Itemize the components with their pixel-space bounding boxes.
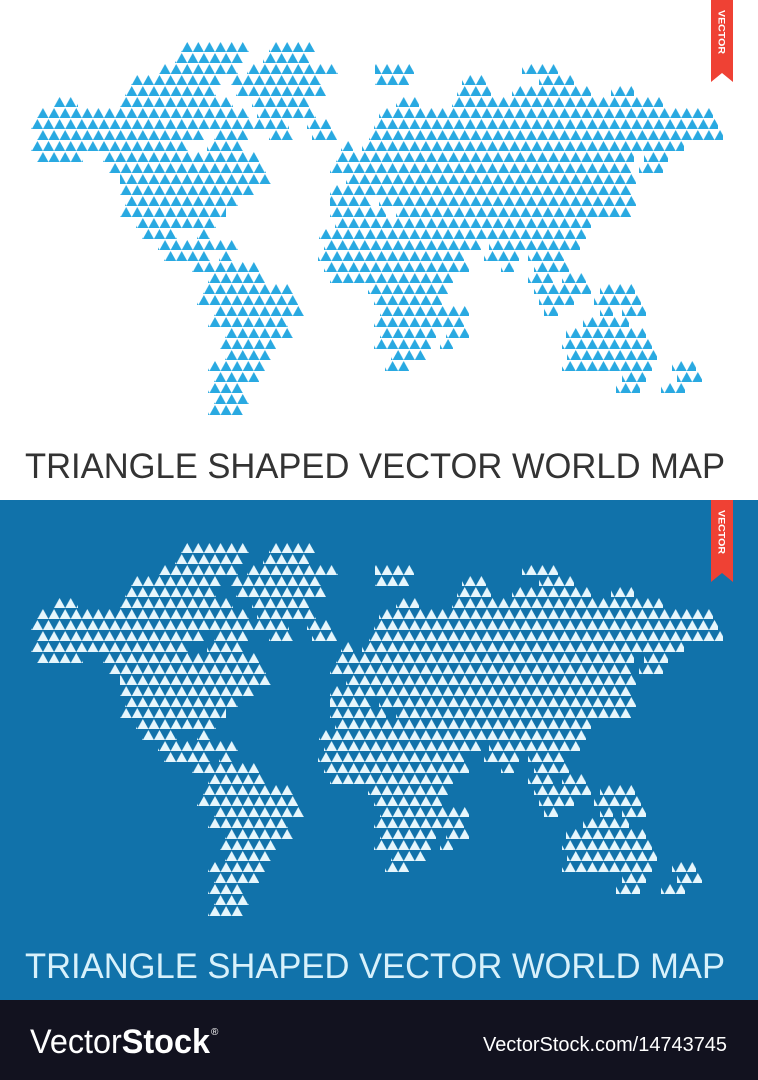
title: bottom: TRIANGLE SHAPED VECTOR WORLD MAP	[25, 947, 725, 986]
map: white triangle world map	[31, 543, 723, 916]
panel: white top section	[0, 0, 758, 500]
logo: registered mark: ®	[211, 1027, 219, 1038]
ribbon: vector badge bottom: VECTOR	[716, 510, 726, 554]
ribbon: vector badge top	[711, 0, 733, 82]
panel: blue bottom section	[0, 500, 758, 1000]
footer: image id: VectorStock.com/14743745	[483, 1034, 727, 1056]
map: blue triangle world map	[31, 42, 723, 415]
logo: VectorStock: VectorStock	[30, 1023, 210, 1061]
title: top: TRIANGLE SHAPED VECTOR WORLD MAP	[25, 447, 725, 486]
ribbon: vector badge top: VECTOR	[716, 10, 726, 54]
footer bar	[0, 1000, 758, 1080]
ribbon: vector badge bottom	[711, 500, 733, 582]
